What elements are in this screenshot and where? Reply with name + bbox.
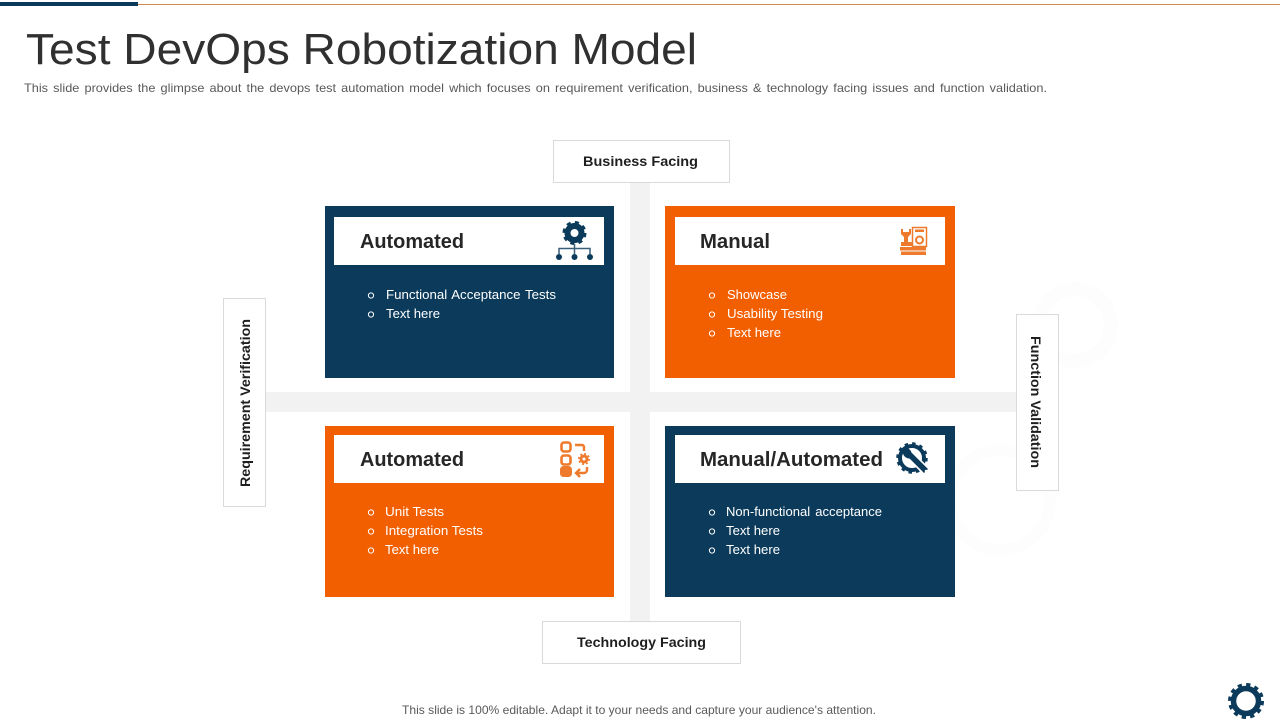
label: technology facing — [542, 622, 740, 664]
bullet list: Text here — [727, 326, 781, 340]
label: business facing: Business Facing — [583, 154, 698, 169]
heading: automated: Automated — [360, 449, 464, 471]
icon: tools and books — [900, 228, 926, 255]
footer note: This slide is 100% editable. Adapt it to your needs and capture your audience's attention. — [402, 703, 876, 717]
top accent bar — [0, 2, 1280, 6]
panel: automated bottom left — [325, 426, 614, 597]
bullet list: Usability Testing — [727, 307, 823, 321]
label: function validation: Function Validation — [1028, 336, 1043, 468]
bullet list — [368, 505, 483, 557]
heading: automated: Automated — [360, 231, 464, 253]
label: requirement verification: Requirement Verification — [238, 319, 253, 487]
bullet list: Text here — [726, 524, 780, 538]
bullet list: Showcase — [727, 288, 787, 302]
panel: manual top right — [665, 206, 955, 378]
label: technology facing: Technology Facing — [577, 635, 706, 650]
panel: automated top left — [325, 206, 614, 378]
bullet list — [709, 505, 882, 557]
panel: manual automated bottom right — [665, 426, 955, 597]
subtitle description: This slide provides the glimpse about the devops test automation model which focuses on requirement verification, business & technology facing issues and function validation. — [24, 81, 1047, 95]
title: Test DevOps Robotization Model — [26, 25, 697, 74]
bullet list: Text here — [385, 543, 439, 557]
watermark gears — [950, 289, 1111, 550]
bullet list: Text here — [726, 543, 780, 557]
label: business facing — [554, 140, 730, 182]
bullet list: Non-functional acceptance — [726, 505, 882, 519]
bullet list — [709, 288, 823, 340]
icon: gear hierarchy — [556, 222, 593, 260]
bullet list: Text here — [386, 307, 440, 321]
cross axis bars — [266, 183, 1016, 621]
label: requirement verification — [224, 298, 266, 506]
icon: gear and wrench — [898, 444, 927, 472]
bullet list — [368, 288, 556, 321]
bullet list: Functional Acceptance Tests — [386, 288, 556, 302]
icon: process flow — [560, 442, 589, 477]
heading: manual: Manual — [700, 231, 770, 253]
bullet list: Integration Tests — [385, 524, 483, 538]
bullet list: Unit Tests — [385, 505, 444, 519]
heading: manual/automated: Manual/Automated — [700, 449, 883, 471]
icon: settings gear — [1230, 685, 1262, 717]
label: function validation — [1016, 314, 1058, 490]
